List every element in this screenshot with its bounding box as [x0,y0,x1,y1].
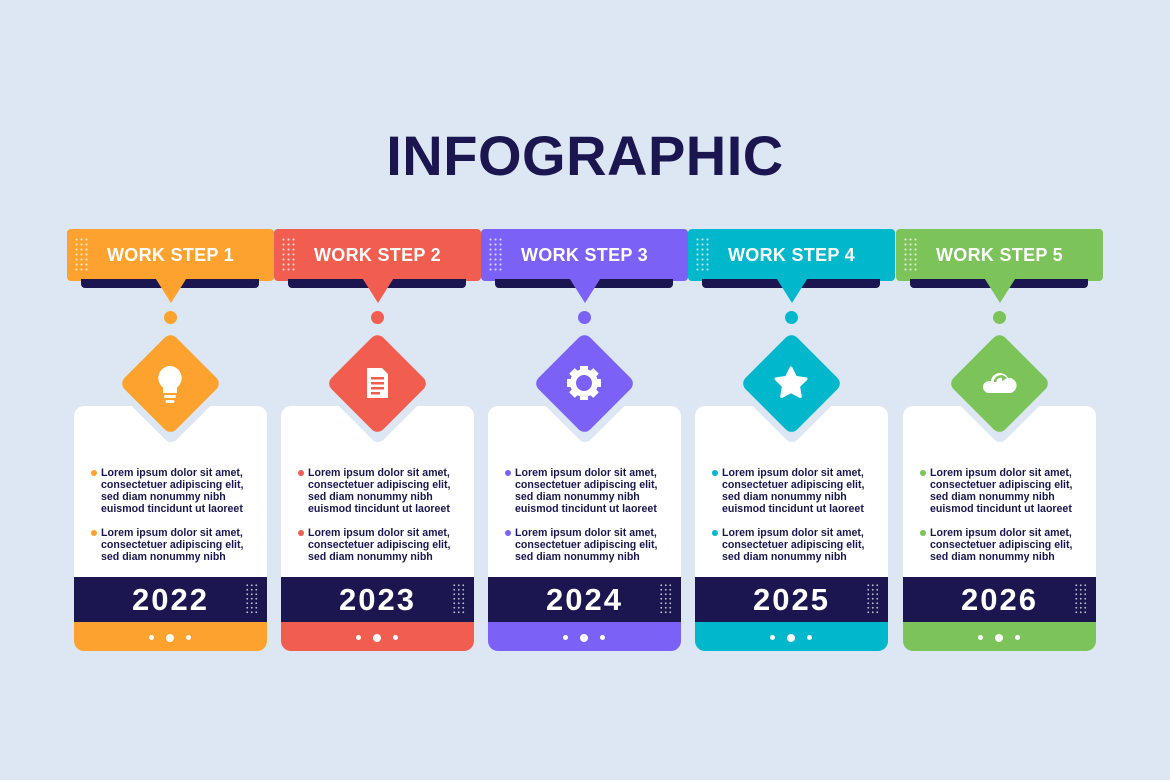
footer [488,622,681,651]
year band: 2023 [339,582,416,617]
header: work step 2: WORK STEP 2 [314,245,441,265]
text block: consectetuer adipiscing elit, [722,539,864,551]
text block: consectetuer adipiscing elit, [930,479,1072,491]
text block: Lorem ipsum dolor sit amet, [308,527,450,539]
text block: Lorem ipsum dolor sit amet, [101,527,243,539]
text block: Lorem ipsum dolor sit amet, [722,467,864,479]
connector dot [164,311,177,324]
card [281,406,474,651]
header: work step 4: WORK STEP 4 [728,245,855,265]
icon: cloud arrow [983,373,1017,393]
header: work step 1 [67,229,274,281]
text block: Lorem ipsum dolor sit amet, [308,467,450,479]
text block [298,467,450,563]
icon: star [774,366,808,398]
icon diamond: lightbulb [119,332,222,435]
text block: euismod tincidunt ut laoreet [101,503,243,515]
text block: consectetuer adipiscing elit, [515,479,657,491]
connector dot [371,311,384,324]
text block [712,467,864,563]
year band: 2024 [546,582,623,617]
text block: euismod tincidunt ut laoreet [308,503,450,515]
text block: sed diam nonummy nibh [308,491,433,503]
text block [920,467,1072,563]
icon diamond: cloud [948,332,1051,435]
year band [903,577,1096,622]
text block: Lorem ipsum dolor sit amet, [722,527,864,539]
text block: sed diam nonummy nibh [515,551,640,563]
footer [281,622,474,651]
year band [281,577,474,622]
text block: consectetuer adipiscing elit, [930,539,1072,551]
text block: euismod tincidunt ut laoreet [515,503,657,515]
title: INFOGRAPHIC [386,124,784,187]
text block: Lorem ipsum dolor sit amet, [515,467,657,479]
card [74,406,267,651]
text block: consectetuer adipiscing elit, [308,539,450,551]
header: work step 2 [274,229,481,281]
text block: Lorem ipsum dolor sit amet, [930,527,1072,539]
icon: gear [567,366,601,400]
text block: consectetuer adipiscing elit, [101,539,243,551]
text block: sed diam nonummy nibh [930,491,1055,503]
text block: sed diam nonummy nibh [515,491,640,503]
panel: step 1 [67,229,274,651]
icon: document [367,368,388,398]
icon: lightbulb [158,366,182,403]
year band [74,577,267,622]
connector dot [578,311,591,324]
header: work step 5: WORK STEP 5 [936,245,1063,265]
text block: consectetuer adipiscing elit, [515,539,657,551]
year band: 2025 [753,582,830,617]
text block: sed diam nonummy nibh [101,551,226,563]
card [695,406,888,651]
header: work step 4 [688,229,895,281]
text block: euismod tincidunt ut laoreet [930,503,1072,515]
footer [74,622,267,651]
connector dot [785,311,798,324]
text block: sed diam nonummy nibh [101,491,226,503]
header: work step 3 [481,229,688,281]
panel: step 5 [896,229,1103,651]
panel: step 3 [481,229,688,651]
icon diamond: gear [533,332,636,435]
footer [695,622,888,651]
text block: sed diam nonummy nibh [930,551,1055,563]
year band: 2026 [961,582,1038,617]
text block: sed diam nonummy nibh [722,551,847,563]
icon diamond: document [326,332,429,435]
year band: 2022 [132,582,209,617]
header: work step 1: WORK STEP 1 [107,245,234,265]
panel: step 2 [274,229,481,651]
icon diamond: star [740,332,843,435]
text block: Lorem ipsum dolor sit amet, [515,527,657,539]
card [488,406,681,651]
text block: sed diam nonummy nibh [722,491,847,503]
text block [505,467,657,563]
text block: consectetuer adipiscing elit, [308,479,450,491]
text block: Lorem ipsum dolor sit amet, [930,467,1072,479]
text block: consectetuer adipiscing elit, [722,479,864,491]
text block [91,467,243,563]
header: work step 5 [896,229,1103,281]
text block: consectetuer adipiscing elit, [101,479,243,491]
header: work step 3: WORK STEP 3 [521,245,648,265]
connector dot [993,311,1006,324]
text block: Lorem ipsum dolor sit amet, [101,467,243,479]
text block: sed diam nonummy nibh [308,551,433,563]
panel: step 4 [688,229,895,651]
text block: euismod tincidunt ut laoreet [722,503,864,515]
footer [903,622,1096,651]
year band [488,577,681,622]
year band [695,577,888,622]
card [903,406,1096,651]
